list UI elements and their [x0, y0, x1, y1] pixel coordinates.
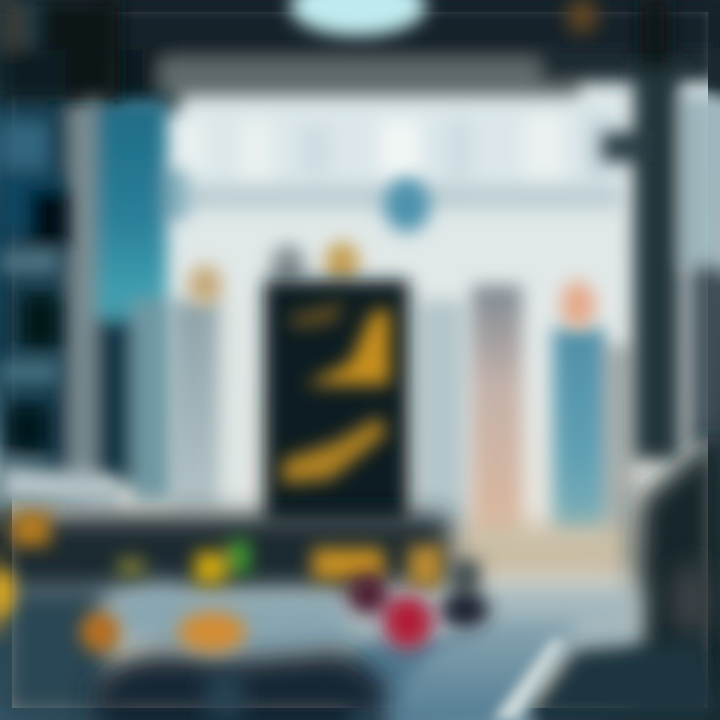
faint sign lettering band	[150, 105, 620, 209]
horizon haze	[450, 525, 630, 580]
car centre highlight	[207, 670, 243, 720]
road underlay	[350, 640, 530, 720]
left street lower	[0, 585, 110, 720]
car windshield	[100, 583, 375, 665]
road far section	[360, 585, 640, 660]
billboard upper chart mark	[290, 302, 390, 385]
ceiling light	[290, 0, 426, 36]
amber ceiling light	[566, 0, 598, 34]
right lane dark	[525, 640, 720, 720]
road	[380, 620, 580, 720]
street level dark band	[0, 515, 450, 595]
right dark column	[602, 0, 720, 460]
right dark overpass	[630, 430, 720, 720]
top dark beam	[0, 0, 720, 110]
background towers	[172, 285, 636, 565]
billboard lower chart mark	[282, 416, 387, 484]
foreground car body	[90, 650, 385, 720]
right brown glow	[672, 562, 708, 638]
left building floors	[0, 0, 122, 514]
left building	[0, 0, 187, 500]
central dark billboard	[264, 280, 409, 525]
yellow signs and lights	[0, 512, 444, 652]
red vehicle	[348, 560, 489, 648]
road marking	[492, 640, 566, 720]
tower tops	[188, 178, 595, 329]
